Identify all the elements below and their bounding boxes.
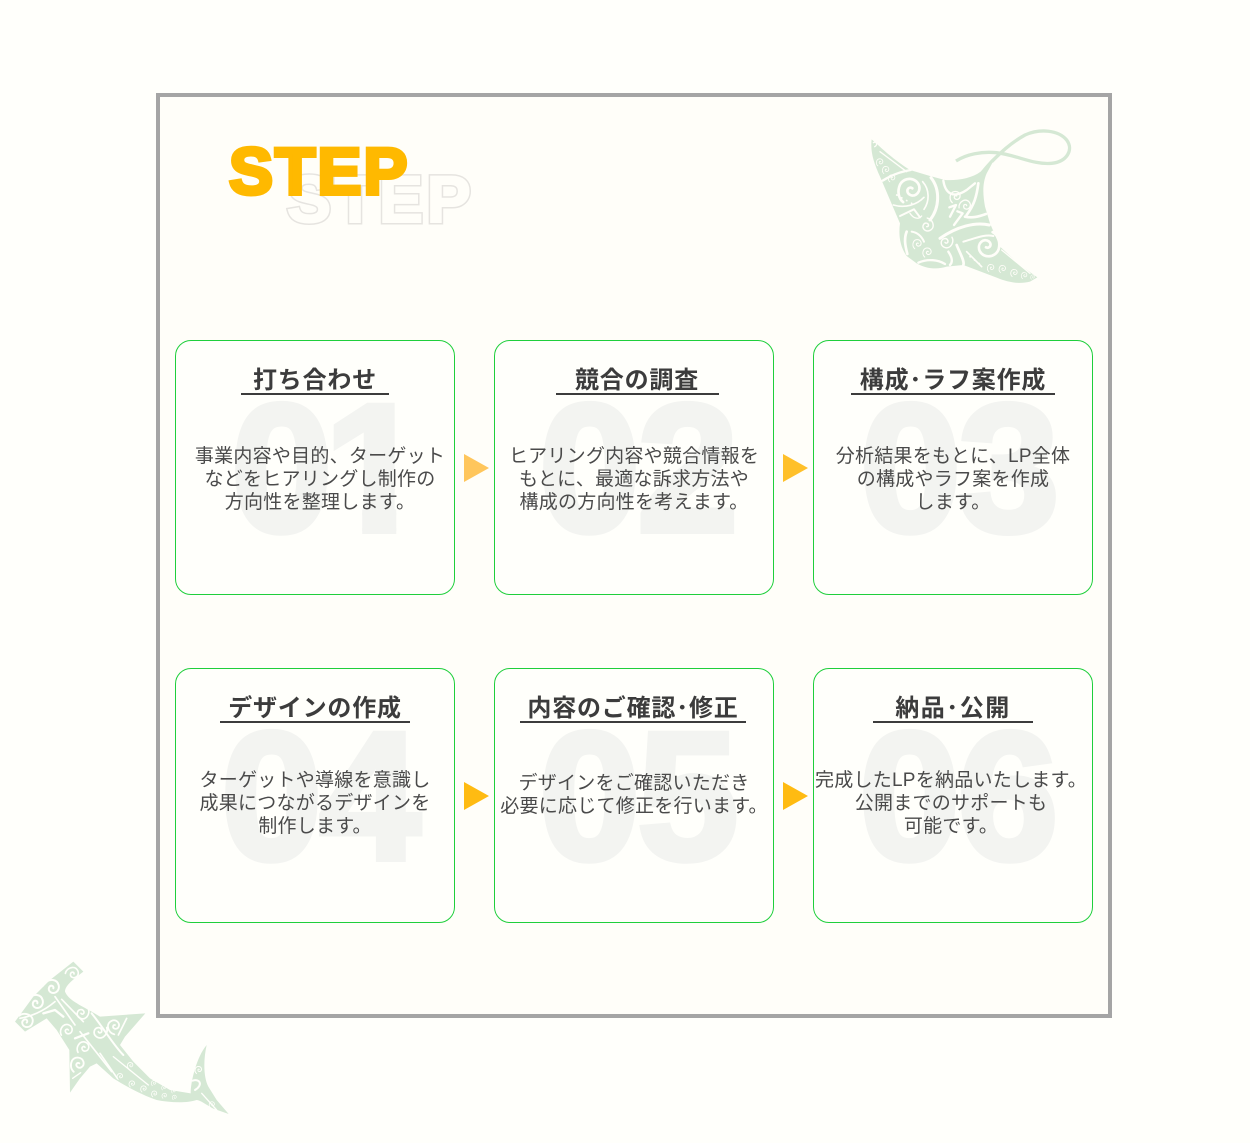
description: step 05: [500, 772, 768, 817]
icon: hammerhead shark: [15, 962, 228, 1114]
description: step 01: 方向性を整理します。: [225, 492, 415, 513]
outlined STEP title shadow: STEP: [287, 162, 475, 236]
heading underline 02: [556, 393, 719, 395]
description: step 04: ターゲットや導線を意識し: [199, 770, 431, 791]
arrow 4 to 5: [464, 782, 489, 810]
description: step 01: [195, 446, 445, 513]
step number 01: 0: [231, 366, 329, 570]
heading: step 05: 内容のご確認･修正: [527, 695, 739, 722]
description: step 01: などをヒアリングし制作の: [204, 469, 436, 490]
panel: step 03: [812, 340, 1092, 595]
heading: step 02: 競合の調査: [575, 367, 699, 394]
description: step 03: の構成やラフ案を作成: [857, 469, 1049, 490]
description: step 06: 完成したLPを納品いたします。: [815, 770, 1087, 791]
arrow 1 to 2: [464, 454, 489, 482]
description: step 02: [509, 446, 759, 513]
step number 06: 06: [859, 694, 1055, 898]
description: step 05: デザインをご確認いただき: [518, 773, 750, 794]
arrow 5 to 6: [783, 782, 808, 810]
outer frame panel: [156, 93, 1112, 1018]
heading underline 05: [520, 721, 746, 723]
description: step 05: 必要に応じて修正を行います。: [500, 796, 768, 817]
description: step 03: 分析結果をもとに、LP全体: [836, 446, 1070, 467]
step number 05: 05: [539, 694, 735, 898]
heading: step 03: 構成･ラフ案作成: [860, 367, 1046, 394]
outlined STEP title shadow: STEP: [287, 162, 475, 236]
description: step 02: 構成の方向性を考えます。: [519, 492, 749, 513]
panel: step 06: [812, 668, 1092, 923]
description: step 06: [815, 770, 1087, 837]
heading underline 03: [851, 393, 1055, 395]
description: step 04: 制作します。: [258, 816, 372, 837]
heading underline 04: [220, 721, 410, 723]
icon: manta ray: [871, 129, 1072, 283]
description: step 04: [199, 770, 431, 837]
description: step 03: します。: [915, 492, 991, 513]
arrow 2 to 3: [783, 454, 808, 482]
heading: step 01: 打ち合わせ: [253, 367, 377, 394]
panel: step 04: [175, 668, 455, 923]
step number 01: [231, 366, 396, 570]
description: step 06: 公開までのサポートも: [855, 793, 1047, 814]
description: step 06: 可能です。: [904, 816, 998, 837]
step number 01: 1: [324, 366, 422, 570]
STEP title: STEP: [229, 134, 409, 208]
description: step 03: [836, 446, 1070, 513]
heading: step 04: デザインの作成: [228, 695, 402, 722]
panel: step 01: [175, 340, 455, 595]
step number 04: 04: [221, 694, 417, 898]
heading: step 06: 納品･公開: [895, 695, 1011, 722]
panel: step 05: [494, 668, 774, 923]
description: step 04: 成果につながるデザインを: [199, 793, 431, 814]
heading underline 01: [241, 393, 389, 395]
step number 03: 03: [860, 366, 1056, 570]
panel: step 02: [494, 340, 774, 595]
heading underline 06: [873, 721, 1033, 723]
step number 02: 02: [539, 366, 735, 570]
description: step 02: もとに、最適な訴求方法や: [519, 469, 749, 490]
description: step 01: 事業内容や目的、ターゲット: [195, 446, 445, 467]
description: step 02: ヒアリング内容や競合情報を: [509, 446, 759, 467]
